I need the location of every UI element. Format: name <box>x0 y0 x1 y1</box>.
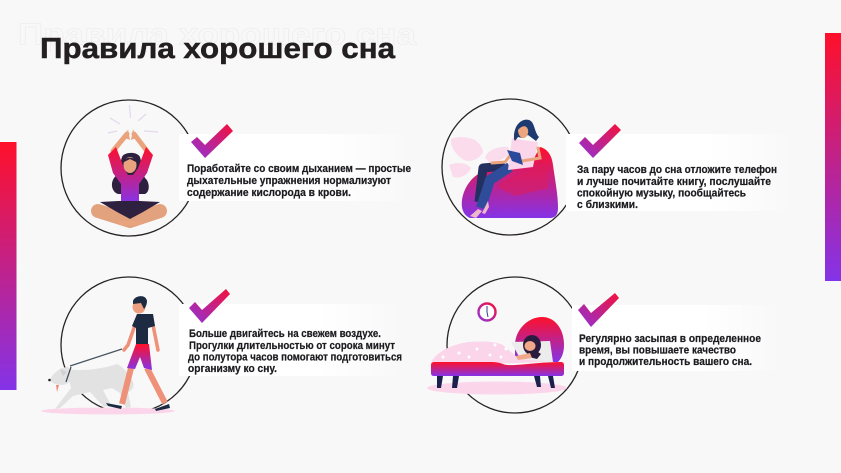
panel: breathing <box>61 100 415 236</box>
circle outline <box>447 277 583 413</box>
title: Правила хорошего сна <box>40 33 396 65</box>
circle outline <box>61 100 197 236</box>
description text: За пару часов до сна отложите телефон <box>577 164 777 176</box>
description text: спокойную музыку, пообщайтесь <box>577 188 746 200</box>
text card <box>179 304 404 376</box>
panel: reading <box>442 99 796 235</box>
description text <box>187 163 411 199</box>
icon: wall clock <box>478 304 496 320</box>
right gradient bar <box>825 33 841 281</box>
icon: check mark <box>578 293 619 327</box>
description text: Регулярно засыпая в определенное <box>579 333 761 345</box>
circle outline <box>442 99 578 235</box>
description text: содержание кислорода в крови. <box>187 187 351 199</box>
description text: Больше двигайтесь на свежем воздухе. <box>189 328 381 340</box>
circle outline <box>61 277 197 413</box>
description text: с близкими. <box>577 199 638 211</box>
panel: walking <box>41 277 404 414</box>
left gradient bar <box>0 142 16 390</box>
description text: и продолжительность вашего сна. <box>579 356 752 368</box>
text card <box>566 134 796 211</box>
icon: check mark <box>189 289 230 323</box>
description text <box>577 164 777 211</box>
illustration: man walking dog <box>41 296 175 414</box>
description text: Прогулки длительностью от сорока минут <box>189 340 395 352</box>
description text: Поработайте со своим дыханием — простые <box>187 163 411 175</box>
text card <box>572 305 782 371</box>
title outline shadow: Правила хорошего сна <box>18 16 417 52</box>
description text: до полутора часов помогают подготовиться <box>188 352 402 364</box>
description text: организму ко сну. <box>188 363 277 375</box>
illustration: woman in beanbag <box>449 120 558 218</box>
description text: время, вы повышаете качество <box>579 344 736 356</box>
description text: дыхательные упражнения нормализуют <box>187 175 391 187</box>
panel: regular sleep <box>427 277 782 413</box>
description text: и лучше почитайте книгу, послушайте <box>577 176 771 188</box>
illustration: sleeping woman in bed <box>427 304 567 394</box>
description text <box>579 333 761 368</box>
illustration: meditating woman <box>98 105 160 225</box>
icon: check mark <box>579 124 621 158</box>
icon: check mark <box>191 124 233 158</box>
text card <box>179 134 415 201</box>
description text <box>188 328 402 375</box>
